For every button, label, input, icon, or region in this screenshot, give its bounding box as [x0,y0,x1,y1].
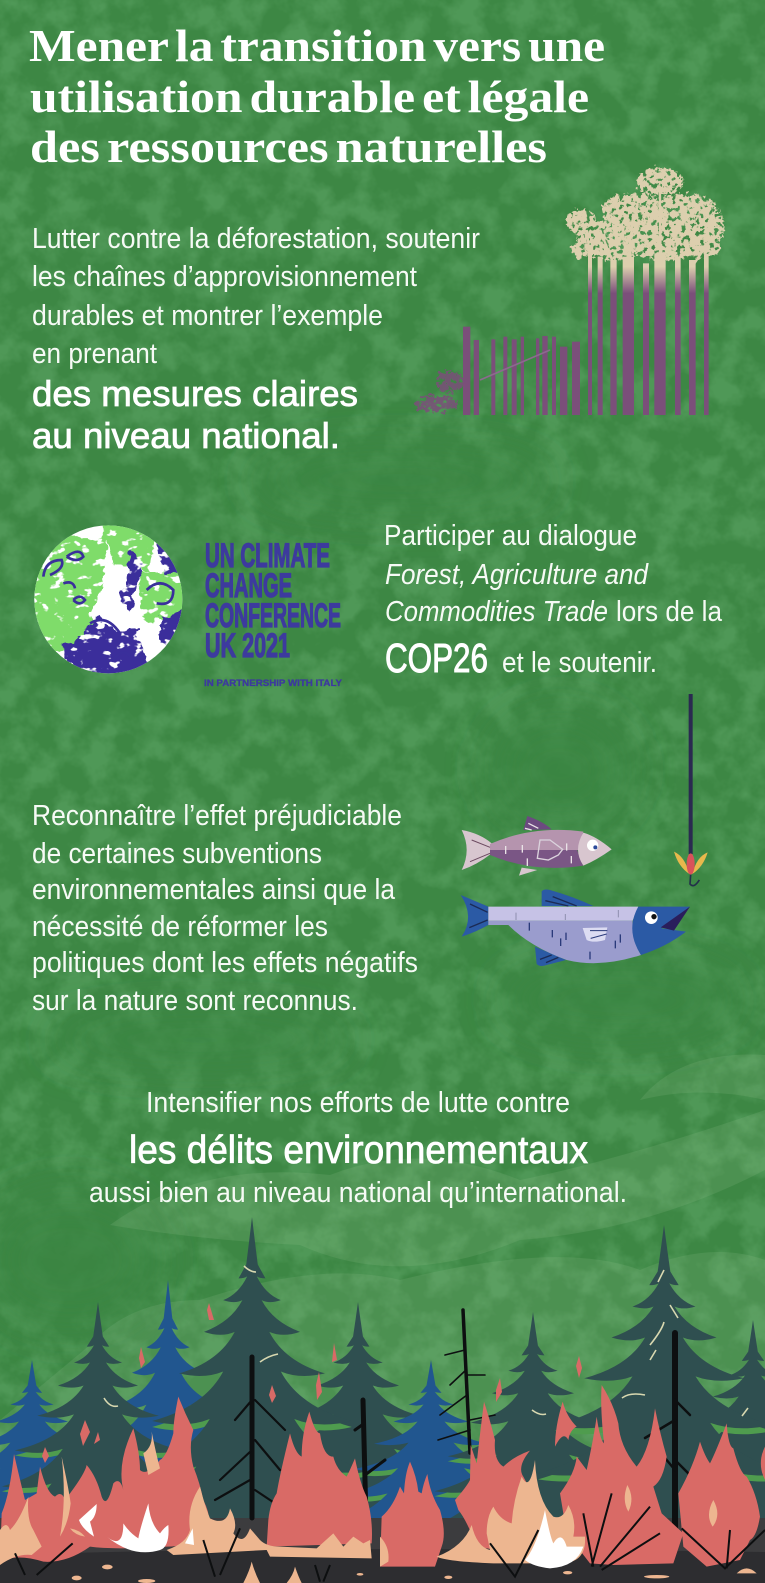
logo: COP26 wordmark: CHANGE [205,567,292,605]
logo: COP26 wordmark: CONFERENCE [205,597,341,635]
flames left [0,1397,372,1583]
text block: environmental crimes [89,1087,627,1209]
title [29,20,605,172]
logo: COP26 globe [34,525,182,674]
text block: deforestation [32,223,480,456]
text block: subsidies: sur la nature sont reconnus. [32,985,358,1017]
ground [0,1518,765,1583]
text block: deforestation: en prenant [32,338,157,370]
title: Mener la transition vers une [29,20,605,71]
text block: subsidies: de certaines subventions [32,838,322,870]
text block: COP26 dialogue: lors de la [616,596,722,628]
standing trunks [588,253,709,415]
text block: deforestation: des mesures claires [32,373,358,414]
text block: subsidies: nécessité de réformer les [32,911,328,943]
text block: deforestation: Lutter contre la déforestation, soutenir [32,223,480,255]
small fish [462,816,612,876]
smoke haze [0,1055,765,1500]
text block: COP26 dialogue: COP26 [385,635,488,681]
illustration: burning forest [0,1217,765,1583]
embers [42,1303,582,1463]
text block: COP26 dialogue [384,520,722,681]
leaf highlights [104,1266,748,1416]
bare trunks [215,1310,700,1530]
text block: environmental crimes: aussi bien au niveau national qu’international. [89,1177,627,1209]
text block: COP26 dialogue: Participer au dialogue [384,520,637,552]
text block: subsidies: Reconnaître l’effet préjudiciable [32,800,402,832]
logo: COP26 wordmark: IN PARTNERSHIP WITH ITALY [204,678,342,688]
big fish [461,889,690,966]
fir trees [0,1217,765,1527]
text block: COP26 dialogue: et le soutenir. [502,647,657,679]
text block: deforestation: durables et montrer l’exemple [32,300,383,332]
text block: COP26 dialogue: Commodities Trade [385,596,608,628]
icon: trees felled [415,168,725,415]
title: utilisation durable et légale [30,71,589,122]
text block: subsidies [32,800,418,1017]
fishing hook [674,694,708,886]
text block: subsidies: environnementales ainsi que la [32,874,395,906]
flames right [380,1385,765,1579]
text block: deforestation: au niveau national. [32,415,340,456]
text block: subsidies: politiques dont les effets négatifs [32,947,418,979]
icon: fishes and hook [461,694,708,966]
logo: COP26 wordmark: UN CLIMATE [205,537,330,575]
logo: COP26 wordmark: UK 2021 [205,627,290,665]
tree crowns [567,168,725,260]
text block: environmental crimes: les délits environnementaux [129,1129,588,1172]
logo: COP26 wordmark [204,537,342,688]
stumps [463,327,580,415]
text block: deforestation: les chaînes d’approvisionnement [32,261,417,293]
text block: COP26 dialogue: Forest, Agriculture and [385,559,649,591]
text block: environmental crimes: Intensifier nos efforts de lutte contre [146,1087,570,1119]
fallen tree [415,350,550,412]
title: des ressources naturelles [30,121,547,172]
